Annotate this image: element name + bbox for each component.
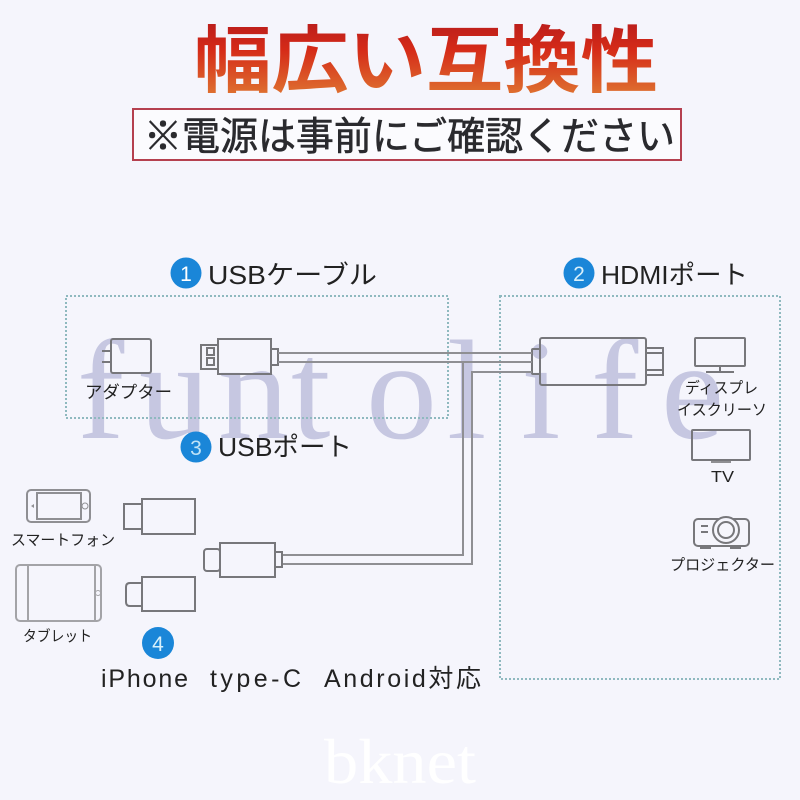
caption: compatible devices: iPhone bbox=[101, 665, 188, 693]
badge 2: 2 bbox=[573, 263, 585, 286]
caption: compatible devices: Android対応 bbox=[324, 665, 481, 693]
badge 1: 1 bbox=[180, 263, 192, 286]
label: projector: プロジェクター bbox=[670, 556, 775, 574]
label: display screen line 2: イスクリーソ bbox=[677, 401, 767, 419]
label: adapter: アダプター bbox=[85, 383, 172, 402]
icon: smartphone bbox=[27, 490, 90, 522]
heading: USB port bbox=[180, 432, 352, 462]
heading: USB cable: USBケーブル bbox=[208, 260, 377, 290]
label: display screen: ディスプレ bbox=[685, 378, 758, 397]
icon: main device plug bbox=[204, 543, 282, 577]
label: smartphone: スマートフォン bbox=[11, 532, 115, 549]
heading: HDMI port: HDMIポート bbox=[601, 260, 748, 290]
icon: projector bbox=[694, 517, 749, 548]
badge 1 bbox=[170, 258, 202, 288]
badge 4 bbox=[142, 627, 174, 659]
icon: HDMI plug bbox=[532, 338, 663, 385]
panel: HDMI port bbox=[500, 258, 780, 679]
icon: USB plug bbox=[201, 339, 278, 374]
title: 幅広い互換性 bbox=[194, 21, 658, 102]
icon: TV bbox=[692, 430, 750, 462]
watermark: bknet: bknet bbox=[324, 726, 476, 797]
icon: display bbox=[695, 338, 745, 372]
heading text: USB port: USBポート bbox=[218, 432, 352, 462]
badge 3 bbox=[180, 432, 212, 462]
caption: compatible devices: type-C bbox=[210, 665, 301, 693]
icon: tablet bbox=[16, 565, 101, 621]
panel: USB cable bbox=[66, 258, 448, 418]
caption: compatible devices bbox=[101, 665, 481, 693]
cable: USB to HDMI bbox=[278, 353, 532, 362]
icon: adapter bbox=[102, 339, 151, 373]
badge 4: 4 bbox=[152, 633, 164, 656]
notice box: ※電源は事前にご確認ください bbox=[144, 116, 675, 159]
icon: Lightning connector bbox=[124, 499, 195, 534]
label: TV: TV bbox=[711, 469, 734, 486]
watermark: funtolife: funtolife bbox=[77, 311, 724, 469]
cable: HDMI to device connector bbox=[282, 362, 532, 564]
badge 3: 3 bbox=[190, 437, 202, 460]
icon: USB-C connector bbox=[126, 577, 195, 611]
badge 2 bbox=[564, 258, 594, 288]
label: tablet: タブレット bbox=[23, 627, 92, 645]
